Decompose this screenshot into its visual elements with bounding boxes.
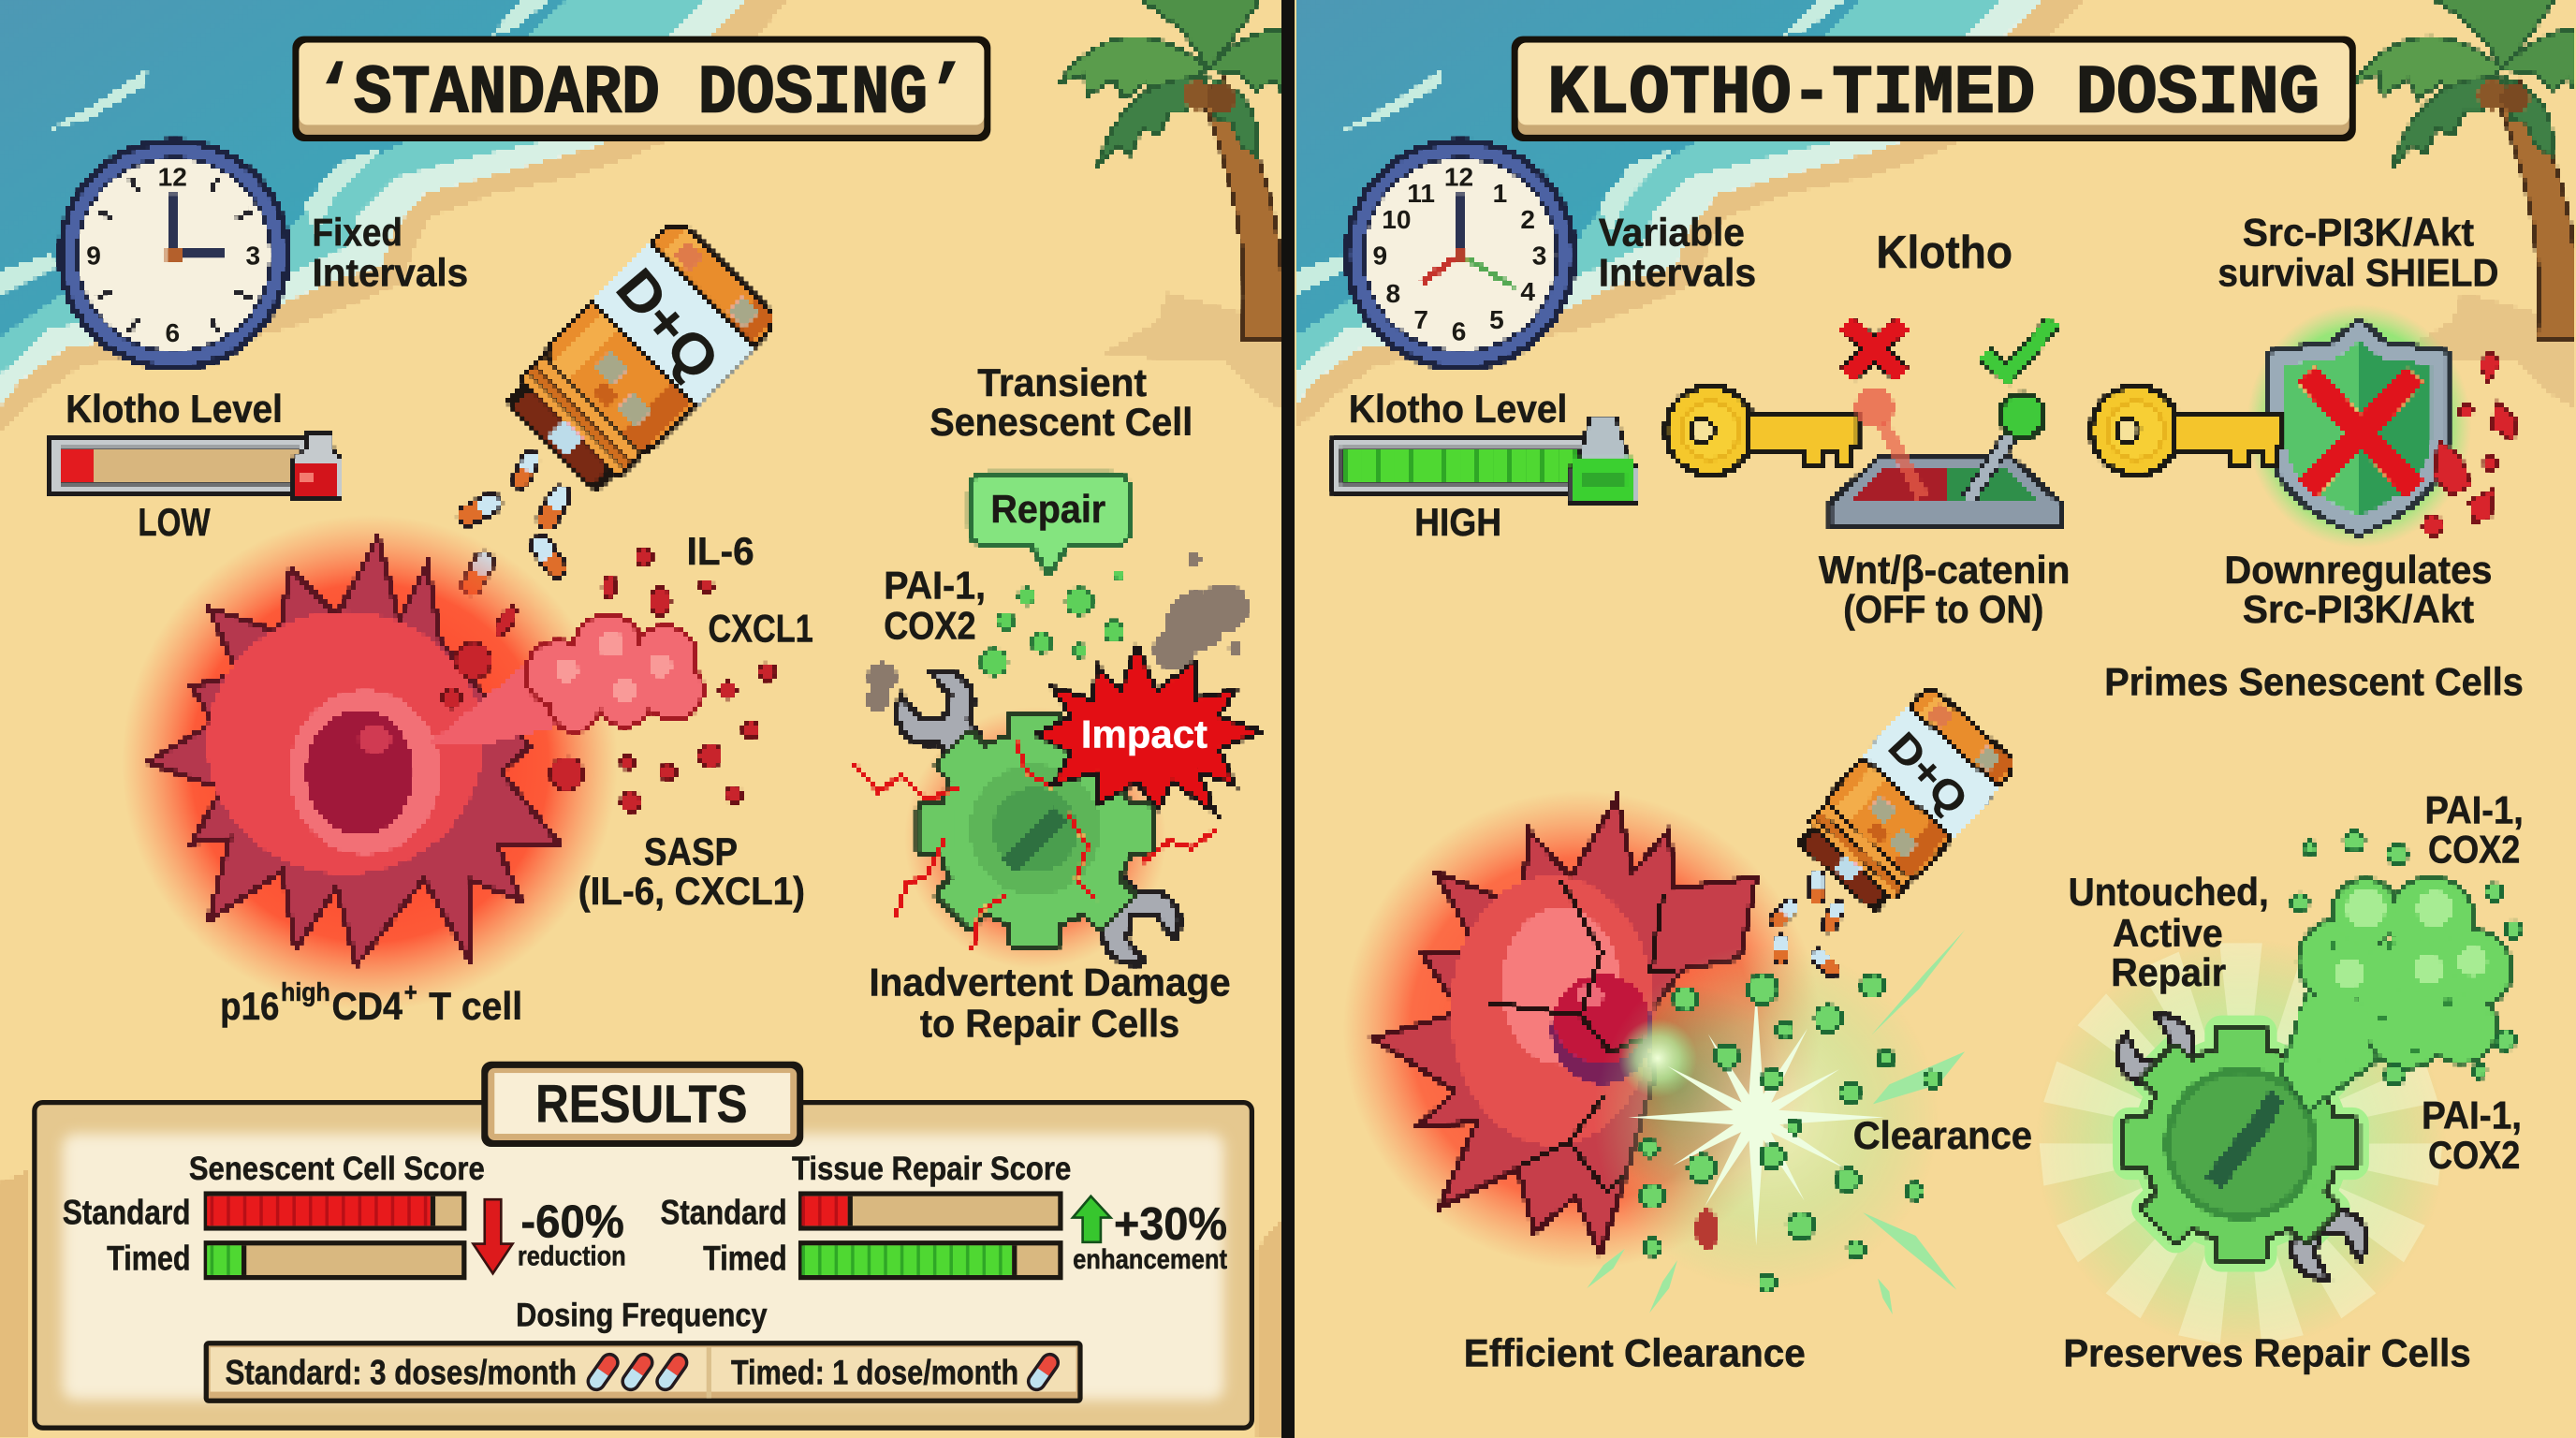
panel: klotho-timed dosing bbox=[1295, 0, 2576, 1374]
label: Src-PI3K/Akt survival shield bbox=[2217, 210, 2499, 294]
glow: senescent cell bbox=[122, 515, 618, 1011]
clock numerals and interval label: Intervals bbox=[1599, 250, 1756, 294]
klotho level meter: low: Klotho Level bbox=[66, 387, 283, 431]
cell: p16 high senescent T cell with SASP plume bbox=[148, 537, 775, 964]
klotho level meter: high: Klotho Level bbox=[1349, 387, 1567, 431]
dosing frequency row: Timed: 1 dose/month bbox=[731, 1354, 1018, 1392]
clock numerals and interval label: 6 bbox=[165, 318, 180, 347]
chart: senescent cell score: reduction bbox=[518, 1240, 626, 1271]
clock numerals and interval label: 11 bbox=[1407, 179, 1435, 208]
icon: clock with fixed intervals bbox=[57, 138, 291, 372]
clock numerals and interval label: 3 bbox=[245, 242, 260, 271]
glow: shield bbox=[2247, 304, 2471, 548]
clock numerals and interval label: 4 bbox=[1520, 277, 1535, 306]
title plate: klotho-timed dosing: KLOTHO-TIMED DOSING bbox=[1547, 55, 2320, 133]
label: PAI-1, COX2: COX2 bbox=[884, 604, 976, 648]
glow and rays: preserved repair cell bbox=[2036, 938, 2446, 1349]
panel: results bbox=[35, 1062, 1251, 1428]
label: transient senescent cell: Senescent Cell bbox=[929, 400, 1193, 444]
clock numerals and interval label: 5 bbox=[1489, 305, 1504, 334]
chart: tissue repair score: +30% bbox=[1114, 1199, 1227, 1250]
labels: PAI-1, COX2 and untouched active repair: PAI-1, bbox=[2425, 787, 2524, 831]
divider between panels bbox=[1281, 0, 1295, 1438]
label: preserves repair cells: Preserves Repair Cells bbox=[2063, 1330, 2471, 1374]
title plate: standard dosing: ‘STANDARD DOSING’ bbox=[315, 55, 966, 133]
speech bubble: repair bbox=[970, 473, 1131, 675]
dark clearance zone bbox=[1577, 983, 1783, 1189]
labels: cell, IL-6, CXCL1, SASP: + bbox=[404, 977, 417, 1006]
speech bubble: repair: Repair bbox=[990, 487, 1105, 531]
label: klotho: Klotho bbox=[1876, 227, 2012, 278]
icon: D+Q pill bottle bbox=[1790, 682, 2021, 919]
label: PAI-1, COX2: PAI-1, bbox=[884, 564, 986, 608]
clock numerals and interval label: 8 bbox=[1386, 279, 1400, 308]
clock numerals and interval label: Fixed bbox=[312, 210, 402, 254]
labels: cell, IL-6, CXCL1, SASP: p16 bbox=[220, 984, 279, 1028]
chart: senescent cell score: Standard bbox=[63, 1194, 191, 1232]
chart: tissue repair score: enhancement bbox=[1073, 1244, 1227, 1275]
effect: green clearance burst bbox=[1587, 930, 1965, 1314]
label: downregulates Src-PI3K/Akt: Downregulates bbox=[2224, 548, 2492, 592]
labels: PAI-1, COX2 and untouched active repair bbox=[2069, 787, 2524, 1177]
clock numerals and interval label: 2 bbox=[1520, 205, 1535, 234]
klotho level meter: low bbox=[48, 387, 342, 544]
label: transient senescent cell bbox=[929, 360, 1193, 444]
labels: cell, IL-6, CXCL1, SASP: T cell bbox=[429, 984, 522, 1028]
chart: senescent cell score bbox=[63, 1151, 626, 1280]
icon: klotho key and Wnt switch: Wnt/β-catenin bbox=[1819, 548, 2070, 592]
labels: PAI-1, COX2 and untouched active repair: Untouched, bbox=[2069, 870, 2269, 914]
labels: cell, IL-6, CXCL1, SASP: IL-6 bbox=[687, 529, 754, 573]
dosing frequency row bbox=[204, 1297, 1083, 1403]
labels: cell, IL-6, CXCL1, SASP: CD4 bbox=[332, 984, 403, 1028]
dosing frequency row: Standard: 3 doses/month bbox=[225, 1354, 577, 1392]
klotho level meter: high bbox=[1331, 387, 1638, 544]
clock numerals and interval label: 3 bbox=[1532, 242, 1546, 271]
clock numerals and interval label bbox=[1372, 162, 1756, 345]
labels: PAI-1, COX2 and untouched active repair: Repair bbox=[2111, 950, 2226, 994]
clock numerals and interval label: 9 bbox=[1372, 242, 1387, 271]
panel: standard dosing bbox=[0, 0, 1331, 1438]
clock numerals and interval label bbox=[86, 162, 468, 347]
clock numerals and interval label: 7 bbox=[1413, 305, 1428, 334]
clock numerals and interval label: 9 bbox=[86, 242, 101, 271]
labels: cell, IL-6, CXCL1, SASP: (IL-6, CXCL1) bbox=[578, 869, 805, 913]
label: clearance: Clearance bbox=[1853, 1113, 2032, 1157]
results plate bbox=[481, 1062, 803, 1147]
icon: klotho key and Wnt switch: (OFF to ON) bbox=[1843, 587, 2043, 631]
icon: key and broken survival shield bbox=[2091, 318, 2517, 536]
label: downregulates Src-PI3K/Akt: Src-PI3K/Akt bbox=[2243, 587, 2474, 631]
icon: klotho key and Wnt switch bbox=[1666, 322, 2070, 631]
clock numerals and interval label: 1 bbox=[1493, 179, 1507, 208]
labels: cell, IL-6, CXCL1, SASP: high bbox=[281, 977, 330, 1006]
clock numerals and interval label: 6 bbox=[1452, 316, 1466, 345]
label: inadvertent damage to repair cells: Inadvertent Damage bbox=[869, 961, 1231, 1005]
title plate: standard dosing bbox=[292, 37, 990, 141]
labels: cell, IL-6, CXCL1, SASP bbox=[220, 529, 813, 1028]
dosing frequency row: Dosing Frequency bbox=[516, 1297, 768, 1333]
beach scene: sea, shore and palm tree bbox=[0, 0, 1331, 1438]
label: efficient clearance: Efficient Clearance bbox=[1464, 1330, 1806, 1374]
icon: D+Q pill bottle with spilled pills: D+Q bbox=[605, 257, 732, 391]
labels: cell, IL-6, CXCL1, SASP: SASP bbox=[644, 829, 738, 873]
icon: damaged repair gear with impact burst: Impact bbox=[1081, 712, 1208, 756]
chart: tissue repair score: Timed bbox=[703, 1240, 787, 1278]
labels: cell, IL-6, CXCL1, SASP: CXCL1 bbox=[708, 606, 813, 650]
icon: damaged repair gear with impact burst bbox=[855, 552, 1262, 976]
label: Src-PI3K/Akt survival shield: Src-PI3K/Akt bbox=[2243, 210, 2474, 254]
icon: active repair gear with green plume bbox=[2108, 831, 2522, 1288]
glow: damaged repair cell bbox=[904, 707, 1166, 969]
results plate: RESULTS bbox=[535, 1075, 748, 1134]
cell: fracturing senescent cell bbox=[1373, 799, 1756, 1254]
clock numerals and interval label: 10 bbox=[1382, 205, 1411, 234]
labels: PAI-1, COX2 and untouched active repair: PAI-1, bbox=[2422, 1093, 2522, 1137]
chart: tissue repair score: Tissue Repair Score bbox=[792, 1151, 1071, 1187]
chart: senescent cell score: Senescent Cell Score bbox=[189, 1151, 485, 1187]
chart: senescent cell score: -60% bbox=[520, 1197, 624, 1248]
klotho level meter: high: HIGH bbox=[1414, 500, 1501, 544]
chart: tissue repair score: Standard bbox=[661, 1194, 787, 1232]
label: primes senescent cells: Primes Senescent Cells bbox=[2104, 659, 2524, 703]
labels: PAI-1, COX2 and untouched active repair: Active bbox=[2113, 911, 2223, 955]
glow: clearing senescent cell bbox=[1343, 791, 1821, 1269]
labels: PAI-1, COX2 and untouched active repair: COX2 bbox=[2428, 827, 2520, 871]
icon: D+Q pill bottle: D+Q bbox=[1880, 724, 1977, 824]
labels: PAI-1, COX2 and untouched active repair: COX2 bbox=[2428, 1133, 2520, 1177]
klotho level meter: low: LOW bbox=[138, 500, 211, 544]
clock numerals and interval label: Variable bbox=[1599, 210, 1745, 254]
label: transient senescent cell: Transient bbox=[977, 360, 1147, 404]
icon: D+Q pill bottle with spilled pills bbox=[452, 213, 783, 601]
beach scene: sea, shore and palm tree bbox=[1295, 0, 2576, 431]
label: PAI-1, COX2 bbox=[884, 564, 986, 648]
chart: senescent cell score: Timed bbox=[107, 1240, 191, 1278]
clock numerals and interval label: Intervals bbox=[312, 250, 468, 294]
chart: tissue repair score bbox=[661, 1151, 1227, 1280]
clock numerals and interval label: 12 bbox=[1444, 162, 1473, 191]
label: Src-PI3K/Akt survival shield: survival SHIELD bbox=[2217, 250, 2499, 294]
label: inadvertent damage to repair cells: to Repair Cells bbox=[920, 1001, 1179, 1045]
label: downregulates Src-PI3K/Akt bbox=[2224, 548, 2492, 631]
particles and pills from timed dose bbox=[1641, 870, 1940, 1292]
icon: clock with variable intervals bbox=[1344, 138, 1577, 372]
title plate: klotho-timed dosing bbox=[1512, 37, 2356, 141]
clock numerals and interval label: 12 bbox=[158, 162, 187, 191]
label: inadvertent damage to repair cells bbox=[869, 961, 1231, 1045]
